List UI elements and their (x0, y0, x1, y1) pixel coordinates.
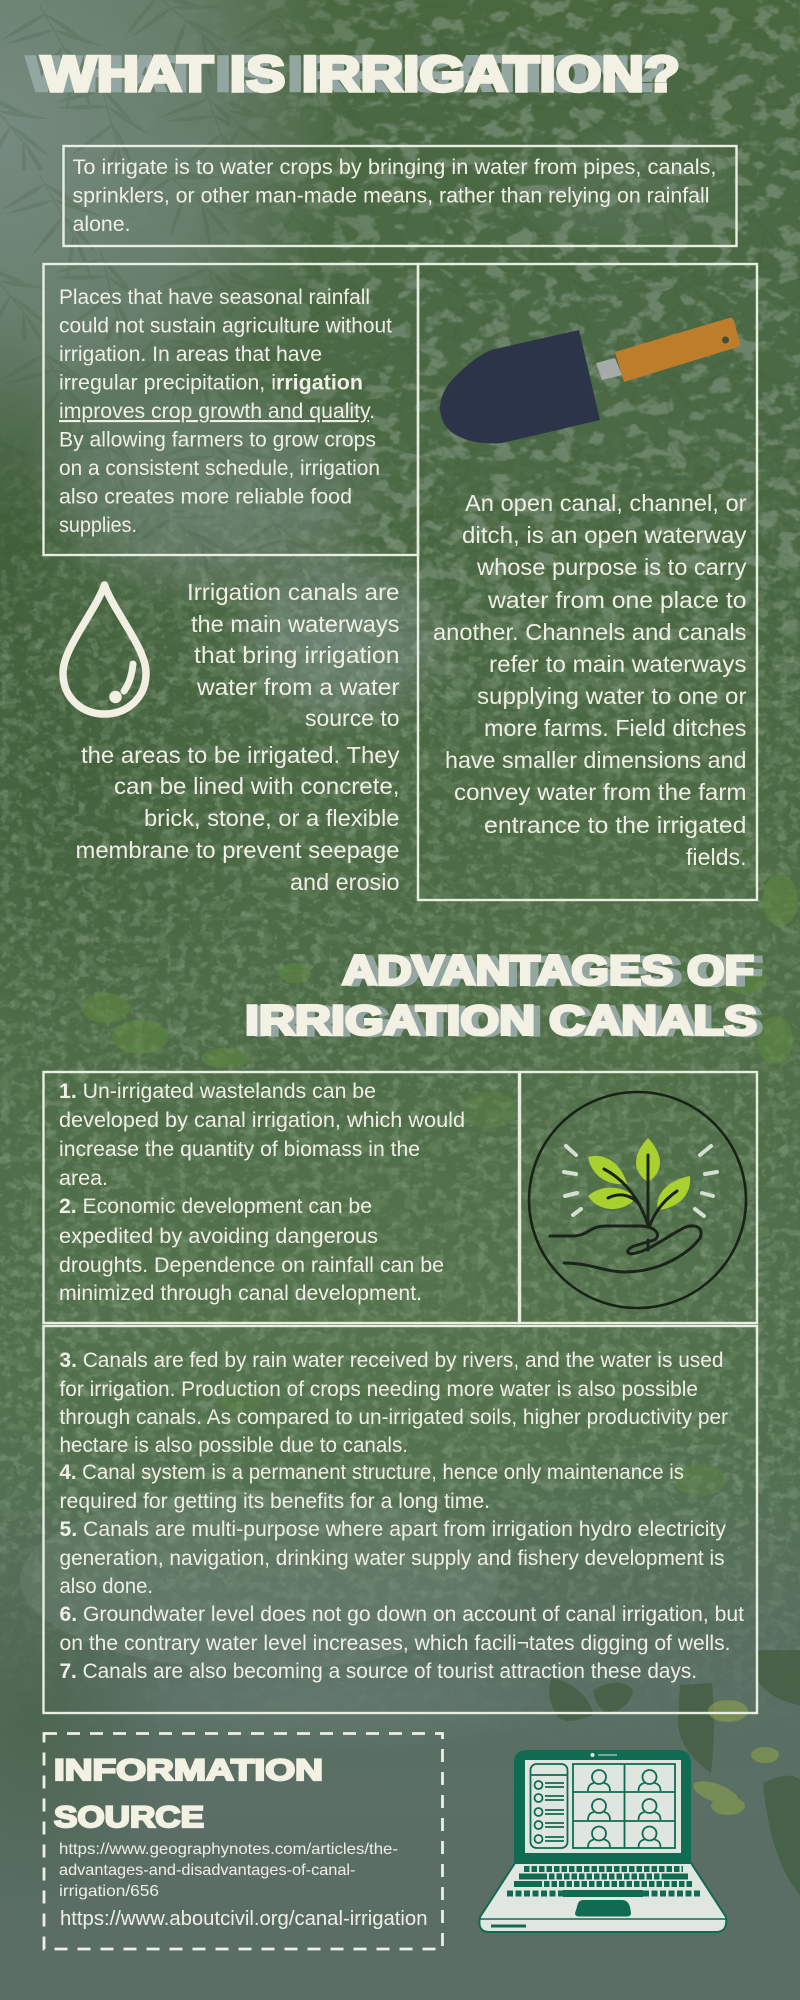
text block: irrigation canals: the main waterways (191, 611, 400, 637)
heading: advantages of irrigation canals: ADVANTAGES OF (342, 946, 754, 994)
panel: open canal text and trowel: fields. (686, 844, 746, 870)
text block: irrigation canals: the areas to be irrigated. They (81, 742, 400, 768)
panel: open canal text and trowel: have smaller dimensions and (445, 747, 746, 773)
icon: laptop with video call (479, 1750, 727, 1932)
text block: source links: https://www.geographynotes.com/articles/the- (59, 1841, 398, 1858)
text block: irrigation canals: that bring irrigation (194, 642, 400, 668)
panel: information source (44, 1734, 442, 1949)
panel: advantages 1 and 2: minimized through canal development. (59, 1282, 422, 1305)
panel: advantages 3 to 7: on the contrary water level increases, which facili¬tates digging of wells. (60, 1632, 730, 1655)
panel: seasonal rainfall text: on a consistent schedule, irrigation (59, 456, 380, 480)
text block: irrigation canals: water from a water (196, 674, 400, 700)
text block: source links: irrigation/656 (59, 1883, 159, 1900)
panel: advantages 1 and 2: area. (59, 1167, 108, 1190)
panel: advantages 1 and 2 (44, 1072, 519, 1323)
panel: seasonal rainfall text: could not sustain agriculture without (59, 314, 392, 338)
panel: open canal text and trowel: entrance to the irrigated (484, 812, 746, 838)
text block: source links: https://www.aboutcivil.org/canal-irrigation (60, 1908, 428, 1930)
panel: seasonal rainfall text: Places that have seasonal rainfall (59, 285, 370, 309)
text block: source links: advantages-and-disadvantages-of-canal- (59, 1862, 356, 1879)
panel: seasonal rainfall text: supplies. (59, 513, 137, 537)
text block: irrigation canals: brick, stone, or a flexible (144, 805, 400, 831)
panel: advantages 3 to 7: 7. Canals are also becoming a source of tourist attraction these days. (60, 1660, 697, 1683)
panel: seasonal rainfall text: irrigation. In areas that have (59, 342, 322, 366)
title: what is irrigation: WHAT IS IRRIGATION? (26, 46, 666, 102)
heading: information source: INFORMATION (54, 1754, 323, 1787)
panel: open canal text and trowel: An open canal, channel, or (465, 490, 747, 516)
panel: seasonal rainfall text: irregular precipitation, irrigation (59, 370, 363, 394)
panel: advantages 1 and 2: expedited by avoiding dangerous (59, 1225, 378, 1248)
panel: open canal text and trowel: another. Channels and canals (433, 619, 746, 645)
icon: hand holding seedling (529, 1092, 746, 1308)
panel: definition (64, 146, 736, 246)
heading: advantages of irrigation canals (245, 946, 763, 1044)
panel: advantages 1 and 2: droughts. Dependence on rainfall can be (59, 1254, 444, 1277)
text block: source links (59, 1841, 428, 1930)
heading: information source: SOURCE (54, 1801, 204, 1834)
panel: advantages 3 to 7: 4. Canal system is a permanent structure, hence only maintenance is (60, 1461, 684, 1484)
panel: advantages 3 to 7: required for getting its benefits for a long time. (60, 1490, 490, 1513)
panel: seasonal rainfall text: also creates more reliable food (59, 484, 352, 508)
heading: information source (54, 1754, 323, 1834)
text block: irrigation canals: membrane to prevent seepage (76, 837, 400, 863)
icon: water drop (63, 585, 146, 714)
text block: irrigation canals: and erosio (290, 869, 400, 895)
panel: advantages 3 to 7: hectare is also possible due to canals. (60, 1434, 408, 1457)
panel: seasonal rainfall text: By allowing farmers to grow crops (59, 428, 376, 452)
panel: definition: To irrigate is to water crops by bringing in water from pipes, canals, (72, 155, 716, 179)
panel: seasonal rainfall text (44, 264, 418, 555)
text block: irrigation canals: source to (305, 705, 400, 731)
panel: open canal text and trowel (418, 264, 757, 900)
title: what is irrigation: WHAT IS IRRIGATION? (41, 46, 680, 102)
panel: advantages 3 to 7: 5. Canals are multi-purpose where apart from irrigation hydro electricity (60, 1518, 726, 1541)
panel: open canal text and trowel: whose purpose is to carry (476, 554, 747, 580)
text block: irrigation canals: can be lined with concrete, (114, 773, 400, 799)
panel: definition: alone. (72, 212, 130, 236)
panel: advantages 1 and 2: developed by canal irrigation, which would (59, 1109, 465, 1132)
panel: open canal text and trowel: supplying water to one or (477, 683, 747, 709)
panel: open canal text and trowel: water from one place to (487, 587, 746, 613)
panel: advantages 1 and 2: increase the quantity of biomass in the (59, 1138, 420, 1161)
panel: advantages 3 to 7: 6. Groundwater level does not go down on account of canal irrigation, but (60, 1603, 744, 1626)
panel: open canal text and trowel: convey water from the farm (454, 779, 746, 805)
panel: advantages 3 to 7: generation, navigation, drinking water supply and fishery development is (60, 1547, 724, 1570)
heading: advantages of irrigation canals: IRRIGATION CANALS (245, 996, 757, 1044)
panel: definition: sprinklers, or other man-made means, rather than relying on rainfall (72, 184, 710, 208)
panel: advantages 3 to 7: also done. (60, 1575, 153, 1598)
text block: irrigation canals: Irrigation canals are (187, 579, 400, 605)
panel: advantages 3 to 7: 3. Canals are fed by rain water received by rivers, and the water is used (60, 1349, 724, 1372)
panel: open canal text and trowel: refer to main waterways (489, 651, 746, 677)
panel: advantages 1 and 2: 2. Economic development can be (59, 1195, 372, 1218)
panel: plant in hand icon (520, 1072, 757, 1323)
panel: seasonal rainfall text: improves crop growth and quality. (59, 399, 375, 423)
heading: advantages of irrigation canals: IRRIGATION CANALS (253, 998, 763, 1044)
panel: open canal text and trowel: more farms. Field ditches (484, 715, 746, 741)
panel: advantages 3 to 7: through canals. As compared to un-irrigated soils, higher productivity per (60, 1406, 728, 1429)
panel: advantages 1 and 2: 1. Un-irrigated wastelands can be (59, 1080, 376, 1103)
panel: open canal text and trowel: ditch, is an open waterway (462, 522, 747, 548)
panel: advantages 3 to 7: for irrigation. Production of crops needing more water is also possible (60, 1378, 698, 1401)
text block: irrigation canals (76, 579, 400, 895)
heading: advantages of irrigation canals: ADVANTAGES OF (350, 948, 763, 994)
icon: garden trowel (440, 318, 740, 443)
panel: advantages 3 to 7 (44, 1326, 757, 1713)
